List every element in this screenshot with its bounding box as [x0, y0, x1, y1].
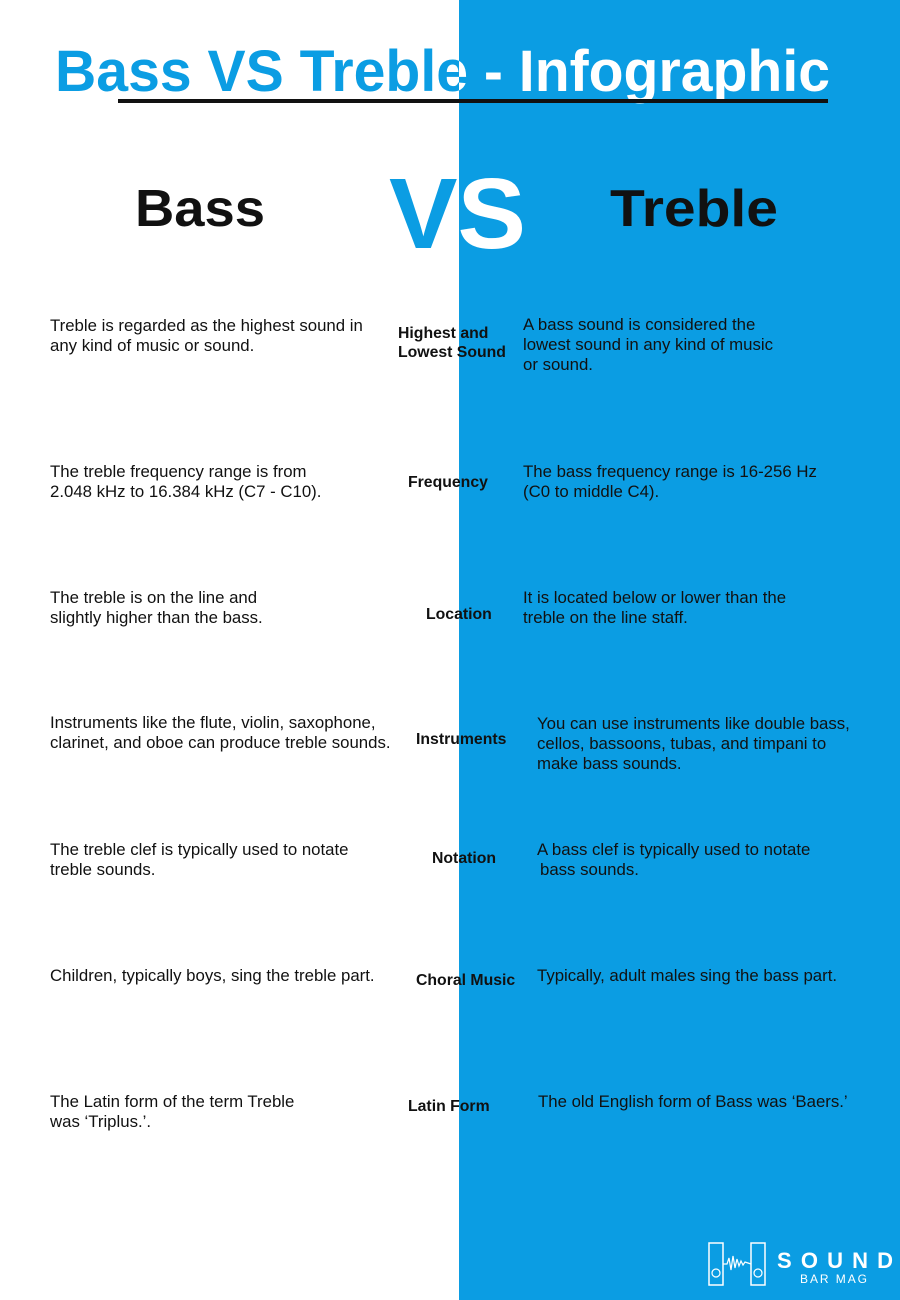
row 2: frequency	[50, 462, 817, 501]
row 2: frequency: 2.048 kHz to 16.384 kHz (C7 - C10).	[50, 482, 321, 501]
row 6: choral music	[50, 966, 837, 989]
row 5: notation: Notation	[432, 850, 496, 867]
row 5: notation: treble sounds.	[50, 860, 155, 879]
row 4: instruments	[50, 713, 850, 773]
row 4: instruments: clarinet, and oboe can produce treble sounds.	[50, 733, 391, 752]
logo: Sound Bar Mag: BAR MAG	[800, 1272, 867, 1286]
row 3: location: treble on the line staff.	[523, 608, 688, 627]
row 6: choral music: Choral Music	[416, 972, 515, 989]
blue panel: treble side	[459, 0, 900, 1300]
logo: Sound Bar Mag	[709, 1243, 893, 1286]
heading: VS: VS	[389, 158, 526, 270]
heading: Treble: Treble	[610, 180, 778, 238]
row 7: latin form: was ‘Triplus.’.	[49, 1112, 151, 1131]
row 2: frequency: Frequency	[408, 474, 488, 491]
row 5: notation: The treble clef is typically used to notate	[50, 840, 348, 859]
row 2: frequency: The treble frequency range is from	[50, 462, 307, 481]
heading: VS: VS	[389, 158, 526, 270]
row 6: choral music: Typically, adult males sing the bass part.	[537, 966, 837, 985]
row 4: instruments: make bass sounds.	[537, 754, 682, 773]
row 5: notation: bass sounds.	[540, 860, 639, 879]
row 2: frequency: The bass frequency range is 16-256 Hz	[523, 462, 817, 481]
row 4: instruments: You can use instruments like double bass,	[537, 714, 850, 733]
row 1: highest and lowest sound: or sound.	[523, 355, 593, 374]
row 7: latin form: The old English form of Bass was ‘Baers.’	[538, 1092, 848, 1111]
row 1: highest and lowest sound: A bass sound is considered the	[523, 315, 755, 334]
row 5: notation: A bass clef is typically used to notate	[537, 840, 810, 859]
row 5: notation	[50, 840, 810, 879]
title: Bass VS Treble - Infographic	[55, 39, 830, 104]
row 1: highest and lowest sound: lowest sound in any kind of music	[523, 335, 773, 354]
row 1: highest and lowest sound: Highest and	[398, 325, 488, 342]
row 4: instruments: Instruments	[416, 731, 507, 748]
logo: Sound Bar Mag: SOUND	[777, 1248, 893, 1273]
row 3: location: The treble is on the line and	[50, 588, 257, 607]
row 1: highest and lowest sound	[50, 315, 773, 374]
row 1: highest and lowest sound: any kind of music or sound.	[50, 336, 254, 355]
row 7: latin form	[49, 1092, 848, 1131]
row 7: latin form: Latin Form	[408, 1098, 490, 1115]
row 4: instruments: cellos, bassoons, tubas, and timpani to	[537, 734, 826, 753]
heading: Bass: Bass	[135, 180, 265, 238]
row 2: frequency: (C0 to middle C4).	[523, 482, 659, 501]
row 3: location: slightly higher than the bass.	[50, 608, 263, 627]
row 3: location	[50, 588, 786, 627]
title: Bass VS Treble - Infographic	[55, 39, 830, 104]
row 4: instruments: Instruments like the flute, violin, saxophone,	[50, 713, 376, 732]
row 7: latin form: The Latin form of the term Treble	[50, 1092, 294, 1111]
row 3: location: It is located below or lower than the	[523, 588, 786, 607]
row 1: highest and lowest sound: Treble is regarded as the highest sound in	[50, 316, 363, 335]
row 1: highest and lowest sound: Lowest Sound	[398, 344, 506, 361]
row 6: choral music: Children, typically boys, sing the treble part.	[50, 966, 375, 985]
row 3: location: Location	[426, 606, 492, 623]
heading: VS	[390, 178, 522, 249]
